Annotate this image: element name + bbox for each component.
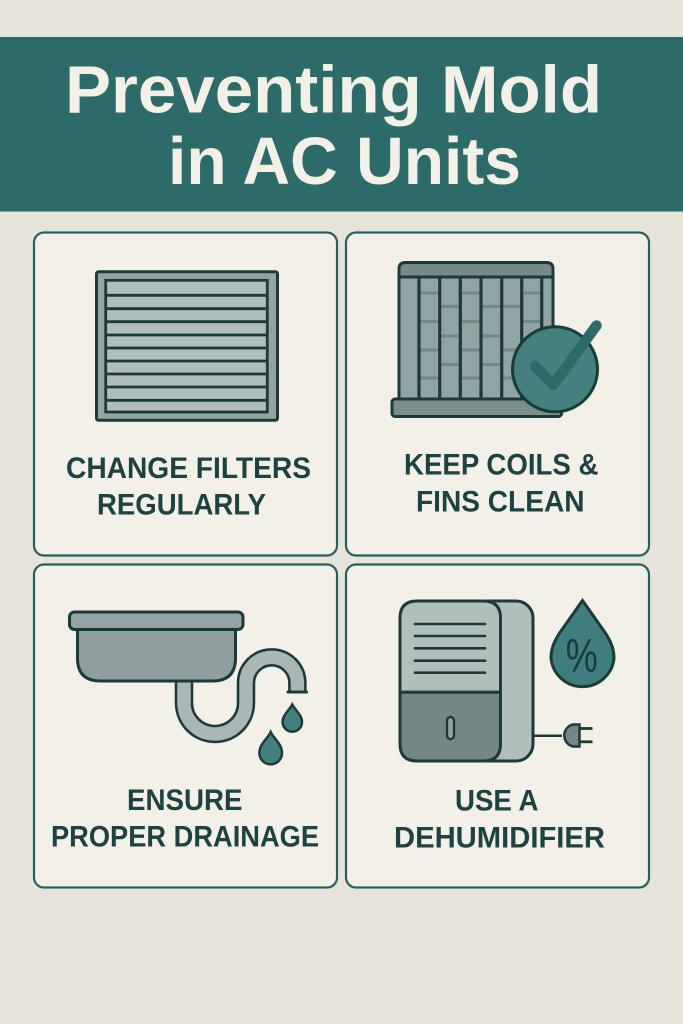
icon: air filter	[96, 272, 278, 420]
label: use a dehumidifier: DEHUMIDIFIER	[394, 821, 605, 854]
label: keep coils and fins clean: KEEP COILS &	[404, 449, 598, 482]
icon: power plug	[533, 724, 592, 746]
icon: water drop large	[259, 732, 282, 764]
label: use a dehumidifier: USE A	[455, 785, 538, 818]
icon: humidity drop: %	[566, 629, 598, 682]
label: ensure proper drainage: PROPER DRAINAGE	[51, 820, 319, 853]
icon: drain pan and pipe	[70, 612, 306, 764]
panel: use a dehumidifier	[346, 564, 649, 888]
panel: change filters regularly	[34, 232, 337, 556]
icon: check badge	[512, 326, 598, 412]
title	[65, 52, 602, 199]
title banner	[0, 37, 683, 212]
label: change filters regularly	[66, 452, 311, 522]
label: change filters regularly: CHANGE FILTERS	[66, 452, 311, 485]
icon: humidity drop	[551, 600, 614, 687]
icon: water drop small	[283, 704, 302, 732]
label: ensure proper drainage	[51, 784, 319, 853]
label: keep coils and fins clean: FINS CLEAN	[416, 485, 584, 518]
title: Preventing Mold	[65, 52, 602, 127]
label: use a dehumidifier	[394, 785, 605, 854]
panel: keep coils and fins clean	[346, 232, 649, 556]
label: ensure proper drainage: ENSURE	[127, 784, 242, 817]
label: keep coils and fins clean	[404, 449, 598, 518]
label: change filters regularly: REGULARLY	[97, 489, 266, 522]
icon: coil unit	[392, 262, 598, 416]
title: in AC Units	[168, 124, 521, 199]
icon: dehumidifier	[400, 600, 614, 761]
panel: ensure proper drainage	[34, 564, 337, 888]
